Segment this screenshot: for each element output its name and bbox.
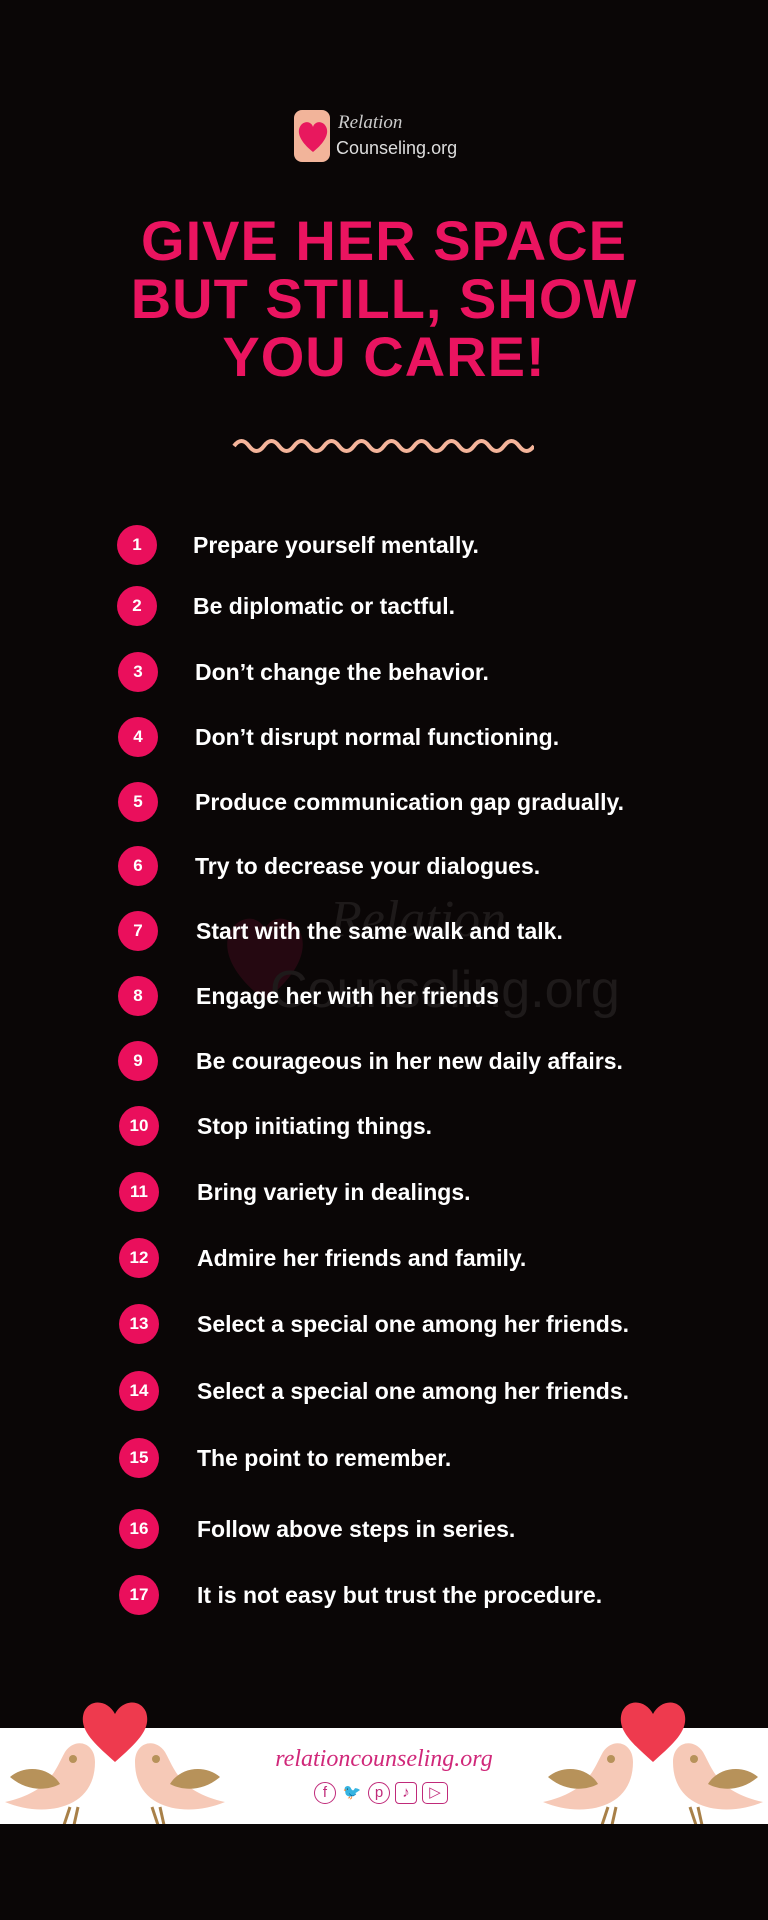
- list: 5: [133, 792, 143, 811]
- social icons: p: [375, 1784, 383, 1801]
- list: 14: [130, 1381, 148, 1400]
- list: 9: [133, 1051, 143, 1070]
- list: 12: [130, 1248, 148, 1267]
- list: Select a special one among her friends.: [197, 1311, 629, 1337]
- list: Don’t disrupt normal functioning.: [195, 724, 559, 750]
- title: BUT STILL, SHOW: [131, 267, 637, 330]
- logo text: Relation: [338, 112, 402, 133]
- watermark: [227, 891, 620, 1019]
- list: Bring variety in dealings.: [197, 1179, 471, 1205]
- list: 8: [133, 986, 143, 1005]
- birds left: [5, 1702, 225, 1824]
- title: GIVE HER SPACE: [141, 209, 627, 272]
- list: 3: [133, 662, 143, 681]
- logo: [294, 110, 457, 162]
- list: Engage her with her friends: [196, 983, 499, 1009]
- list: 6: [133, 856, 143, 875]
- list: Follow above steps in series.: [197, 1516, 515, 1542]
- social icons: f: [323, 1784, 327, 1801]
- wavy divider: [232, 439, 534, 453]
- list: 17: [130, 1585, 148, 1604]
- list: Try to decrease your dialogues.: [195, 853, 540, 879]
- list: The point to remember.: [197, 1445, 451, 1471]
- list: 15: [130, 1448, 148, 1467]
- social icons: ♪: [402, 1784, 410, 1801]
- list: Stop initiating things.: [197, 1113, 432, 1139]
- watermark: Counseling.org: [270, 961, 620, 1019]
- list: [117, 525, 629, 1615]
- list: 2: [132, 596, 142, 615]
- list: 4: [133, 727, 143, 746]
- list: Don’t change the behavior.: [195, 659, 489, 685]
- birds right: [543, 1702, 763, 1824]
- list: 11: [130, 1182, 148, 1201]
- icon: fist heart: [294, 110, 330, 162]
- list: 10: [130, 1116, 148, 1135]
- list: Select a special one among her friends.: [197, 1378, 629, 1404]
- title: YOU CARE!: [222, 325, 546, 388]
- logo: Counseling.org: [336, 138, 457, 158]
- list: It is not easy but trust the procedure.: [197, 1582, 602, 1608]
- list: Prepare yourself mentally.: [193, 532, 479, 558]
- list: Produce communication gap gradually.: [195, 789, 624, 815]
- list: 1: [132, 535, 142, 554]
- list: Admire her friends and family.: [197, 1245, 526, 1271]
- title: [131, 209, 637, 388]
- list: 13: [130, 1314, 148, 1333]
- list: 16: [130, 1519, 148, 1538]
- list: 7: [133, 921, 143, 940]
- footer url: relationcounseling.org: [275, 1746, 493, 1772]
- watermark: Relation: [330, 891, 506, 948]
- list: Be courageous in her new daily affairs.: [196, 1048, 623, 1074]
- social icons: 🐦: [343, 1784, 361, 1801]
- footer band: [0, 1728, 768, 1824]
- social icons: [314, 1782, 448, 1804]
- list: Start with the same walk and talk.: [196, 918, 563, 944]
- social icons: ▷: [429, 1784, 441, 1801]
- list: Be diplomatic or tactful.: [193, 593, 455, 619]
